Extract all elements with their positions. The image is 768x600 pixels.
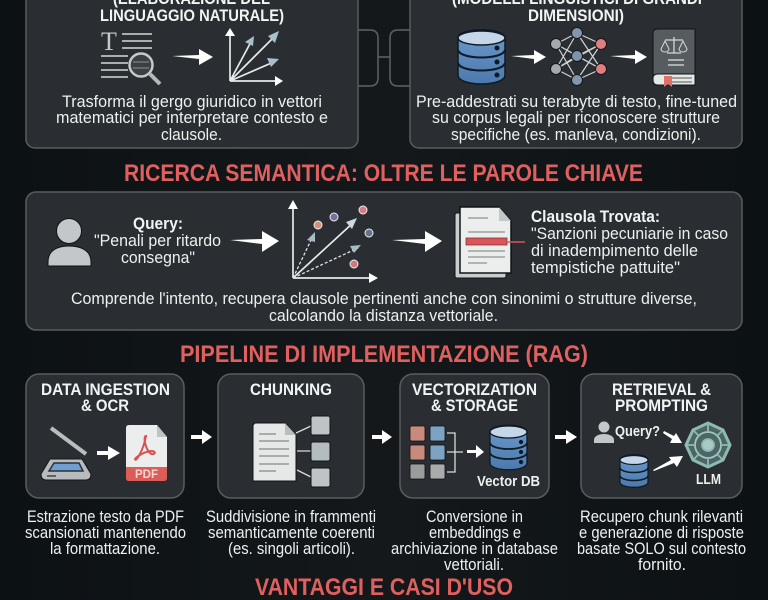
step: retrieval — [581, 374, 742, 498]
caption: e generazione di risposte — [579, 523, 744, 542]
caption: semanticamente coerenti — [208, 523, 375, 542]
body text: matematici per interpretare contesto e — [56, 108, 328, 127]
icon: small database — [620, 455, 648, 487]
arrow — [191, 430, 212, 444]
icon: embedding grid — [410, 426, 463, 479]
icon: user — [48, 218, 91, 266]
caption — [391, 507, 558, 574]
heading: NLP: LINGUAGGIO NATURALE) — [100, 6, 284, 25]
icon: text with magnifier: T — [101, 27, 117, 56]
icon: neural network — [550, 28, 606, 86]
step title: CHUNKING — [250, 380, 332, 399]
arrow — [467, 445, 484, 458]
clause text: "Sanzioni pecuniarie in caso — [531, 224, 728, 243]
arrow — [511, 50, 546, 64]
body text: su corpus legali per riconoscere strutture — [432, 108, 720, 127]
caption: fornito. — [638, 555, 686, 574]
step title — [41, 380, 170, 415]
step title: & OCR — [81, 396, 129, 415]
step title — [612, 380, 711, 415]
caption: scansionati mantenendo — [25, 523, 186, 542]
icon: vector database — [490, 425, 527, 470]
body text — [416, 92, 737, 144]
query text: "Penali per ritardo — [94, 231, 221, 250]
arrow — [610, 50, 647, 64]
arrow — [653, 456, 683, 471]
panel: semantic search — [26, 192, 742, 330]
body text: Comprende l'intento, recupera clausole pertinenti anche con sinonimi o strutture diverse, — [71, 289, 697, 308]
chart: vector space — [288, 200, 378, 283]
caption: Estrazione testo da PDF — [27, 507, 184, 526]
arrow — [392, 231, 442, 252]
caption: embeddings e — [429, 523, 521, 542]
icon: user query — [594, 422, 660, 443]
caption: archiviazione in database — [391, 539, 558, 558]
step: data ingestion — [26, 374, 184, 498]
arrow — [230, 231, 279, 252]
caption: Suddivisione in frammenti — [206, 507, 376, 526]
step title: DATA INGESTION — [41, 380, 170, 399]
heading: semantic search: RICERCA SEMANTICA: OLTRE LE PAROLE CHIAVE — [124, 160, 643, 187]
arrow — [663, 431, 682, 443]
heading: pipeline: PIPELINE DI IMPLEMENTAZIONE (RAG) — [180, 341, 588, 368]
heading: LLM: DIMENSIONI) — [528, 6, 624, 25]
label: LLM — [696, 472, 721, 488]
icon: highlighted document — [455, 207, 525, 278]
clause text — [531, 207, 728, 277]
heading: NLP — [100, 0, 284, 25]
step title: & STORAGE — [431, 396, 518, 415]
body text: Pre-addestrati su terabyte di testo, fine-tuned — [416, 92, 737, 111]
caption: vettoriali. — [444, 555, 504, 574]
query text — [94, 214, 221, 267]
body text — [56, 92, 328, 144]
clause text: di inadempimento delle — [531, 241, 698, 260]
panel: LLM — [410, 0, 742, 148]
step title: VECTORIZATION — [412, 380, 537, 399]
icon: law book — [653, 29, 695, 87]
caption: Recupero chunk rilevanti — [580, 507, 743, 526]
icon: LLM network — [686, 423, 730, 467]
query text: Query: — [133, 214, 183, 233]
panel: NLP — [26, 0, 358, 148]
icon: PDF: PDF — [135, 469, 158, 481]
icon: vector axes — [225, 28, 283, 86]
icon: document chunks — [253, 416, 330, 487]
icon: PDF — [126, 425, 167, 481]
icon: database — [458, 30, 505, 84]
caption — [577, 507, 746, 574]
icon: text with magnifier — [101, 27, 160, 84]
arrow — [172, 49, 213, 65]
body text — [71, 289, 697, 325]
caption: Conversione in — [426, 507, 523, 526]
body text: Trasforma il gergo giuridico in vettori — [62, 92, 322, 111]
connector between panels — [358, 30, 410, 86]
label: Vector DB — [477, 474, 540, 490]
icon: scanner — [41, 428, 91, 480]
clause text: tempistiche pattuite" — [531, 258, 680, 277]
heading: LLM — [452, 0, 702, 25]
caption — [206, 507, 376, 558]
body text: calcolando la distanza vettoriale. — [269, 306, 498, 325]
clause text: Clausola Trovata: — [531, 207, 660, 226]
caption — [25, 507, 186, 558]
step title: RETRIEVAL & — [612, 380, 711, 399]
caption: (es. singoli articoli). — [228, 539, 355, 558]
step: chunking — [218, 374, 364, 498]
body text: clausole. — [161, 125, 222, 144]
icon: user query: Query? — [615, 424, 660, 440]
body text: specifiche (es. manleva, condizioni). — [451, 125, 701, 144]
step title: PROMPTING — [615, 396, 708, 415]
step title — [412, 380, 537, 415]
query text: consegna" — [121, 248, 195, 267]
arrow — [372, 430, 392, 444]
caption: la formattazione. — [50, 539, 160, 558]
arrow — [555, 430, 577, 444]
arrow — [97, 446, 120, 460]
step: vectorization — [400, 374, 549, 498]
